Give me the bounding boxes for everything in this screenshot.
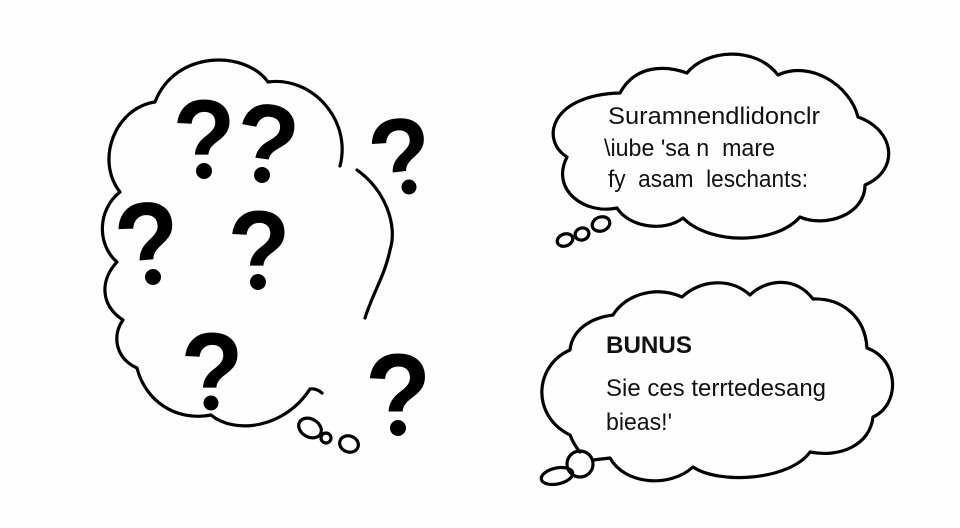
question mark 4: ? (109, 175, 186, 312)
panel: left thought cloud with question marks (102, 60, 438, 461)
cloud text: \iube 'sa n mare (604, 135, 775, 162)
question mark 7: ? (365, 330, 431, 461)
question mark 6: ? (181, 310, 243, 435)
cloud outline (542, 282, 893, 481)
cloud text: Suramnendlidonclr (608, 103, 820, 130)
question mark 3: ? (363, 94, 438, 221)
question mark 5: ? (228, 188, 290, 313)
question mark 2: ? (227, 78, 306, 210)
thought trail bubbles (540, 451, 593, 487)
question mark 1: ? (173, 77, 235, 202)
cloud text: fy asam leschants: (608, 166, 808, 193)
cloud heading: BUNUS (606, 332, 692, 359)
cloud text (604, 103, 820, 193)
question marks (109, 77, 438, 461)
cloud outline: left main arc (102, 60, 342, 426)
panel: top right thought cloud (553, 54, 889, 248)
thought trail bubbles (295, 414, 361, 455)
cloud outline (553, 54, 889, 238)
cloud text (606, 375, 826, 436)
cloud outline: right broken arc (357, 170, 392, 318)
cloud text: bieas!' (606, 409, 672, 436)
cloud text: Sie ces terrtedesang (606, 375, 826, 402)
panel: bottom right thought cloud (540, 282, 893, 487)
thought trail bubbles (555, 214, 612, 248)
